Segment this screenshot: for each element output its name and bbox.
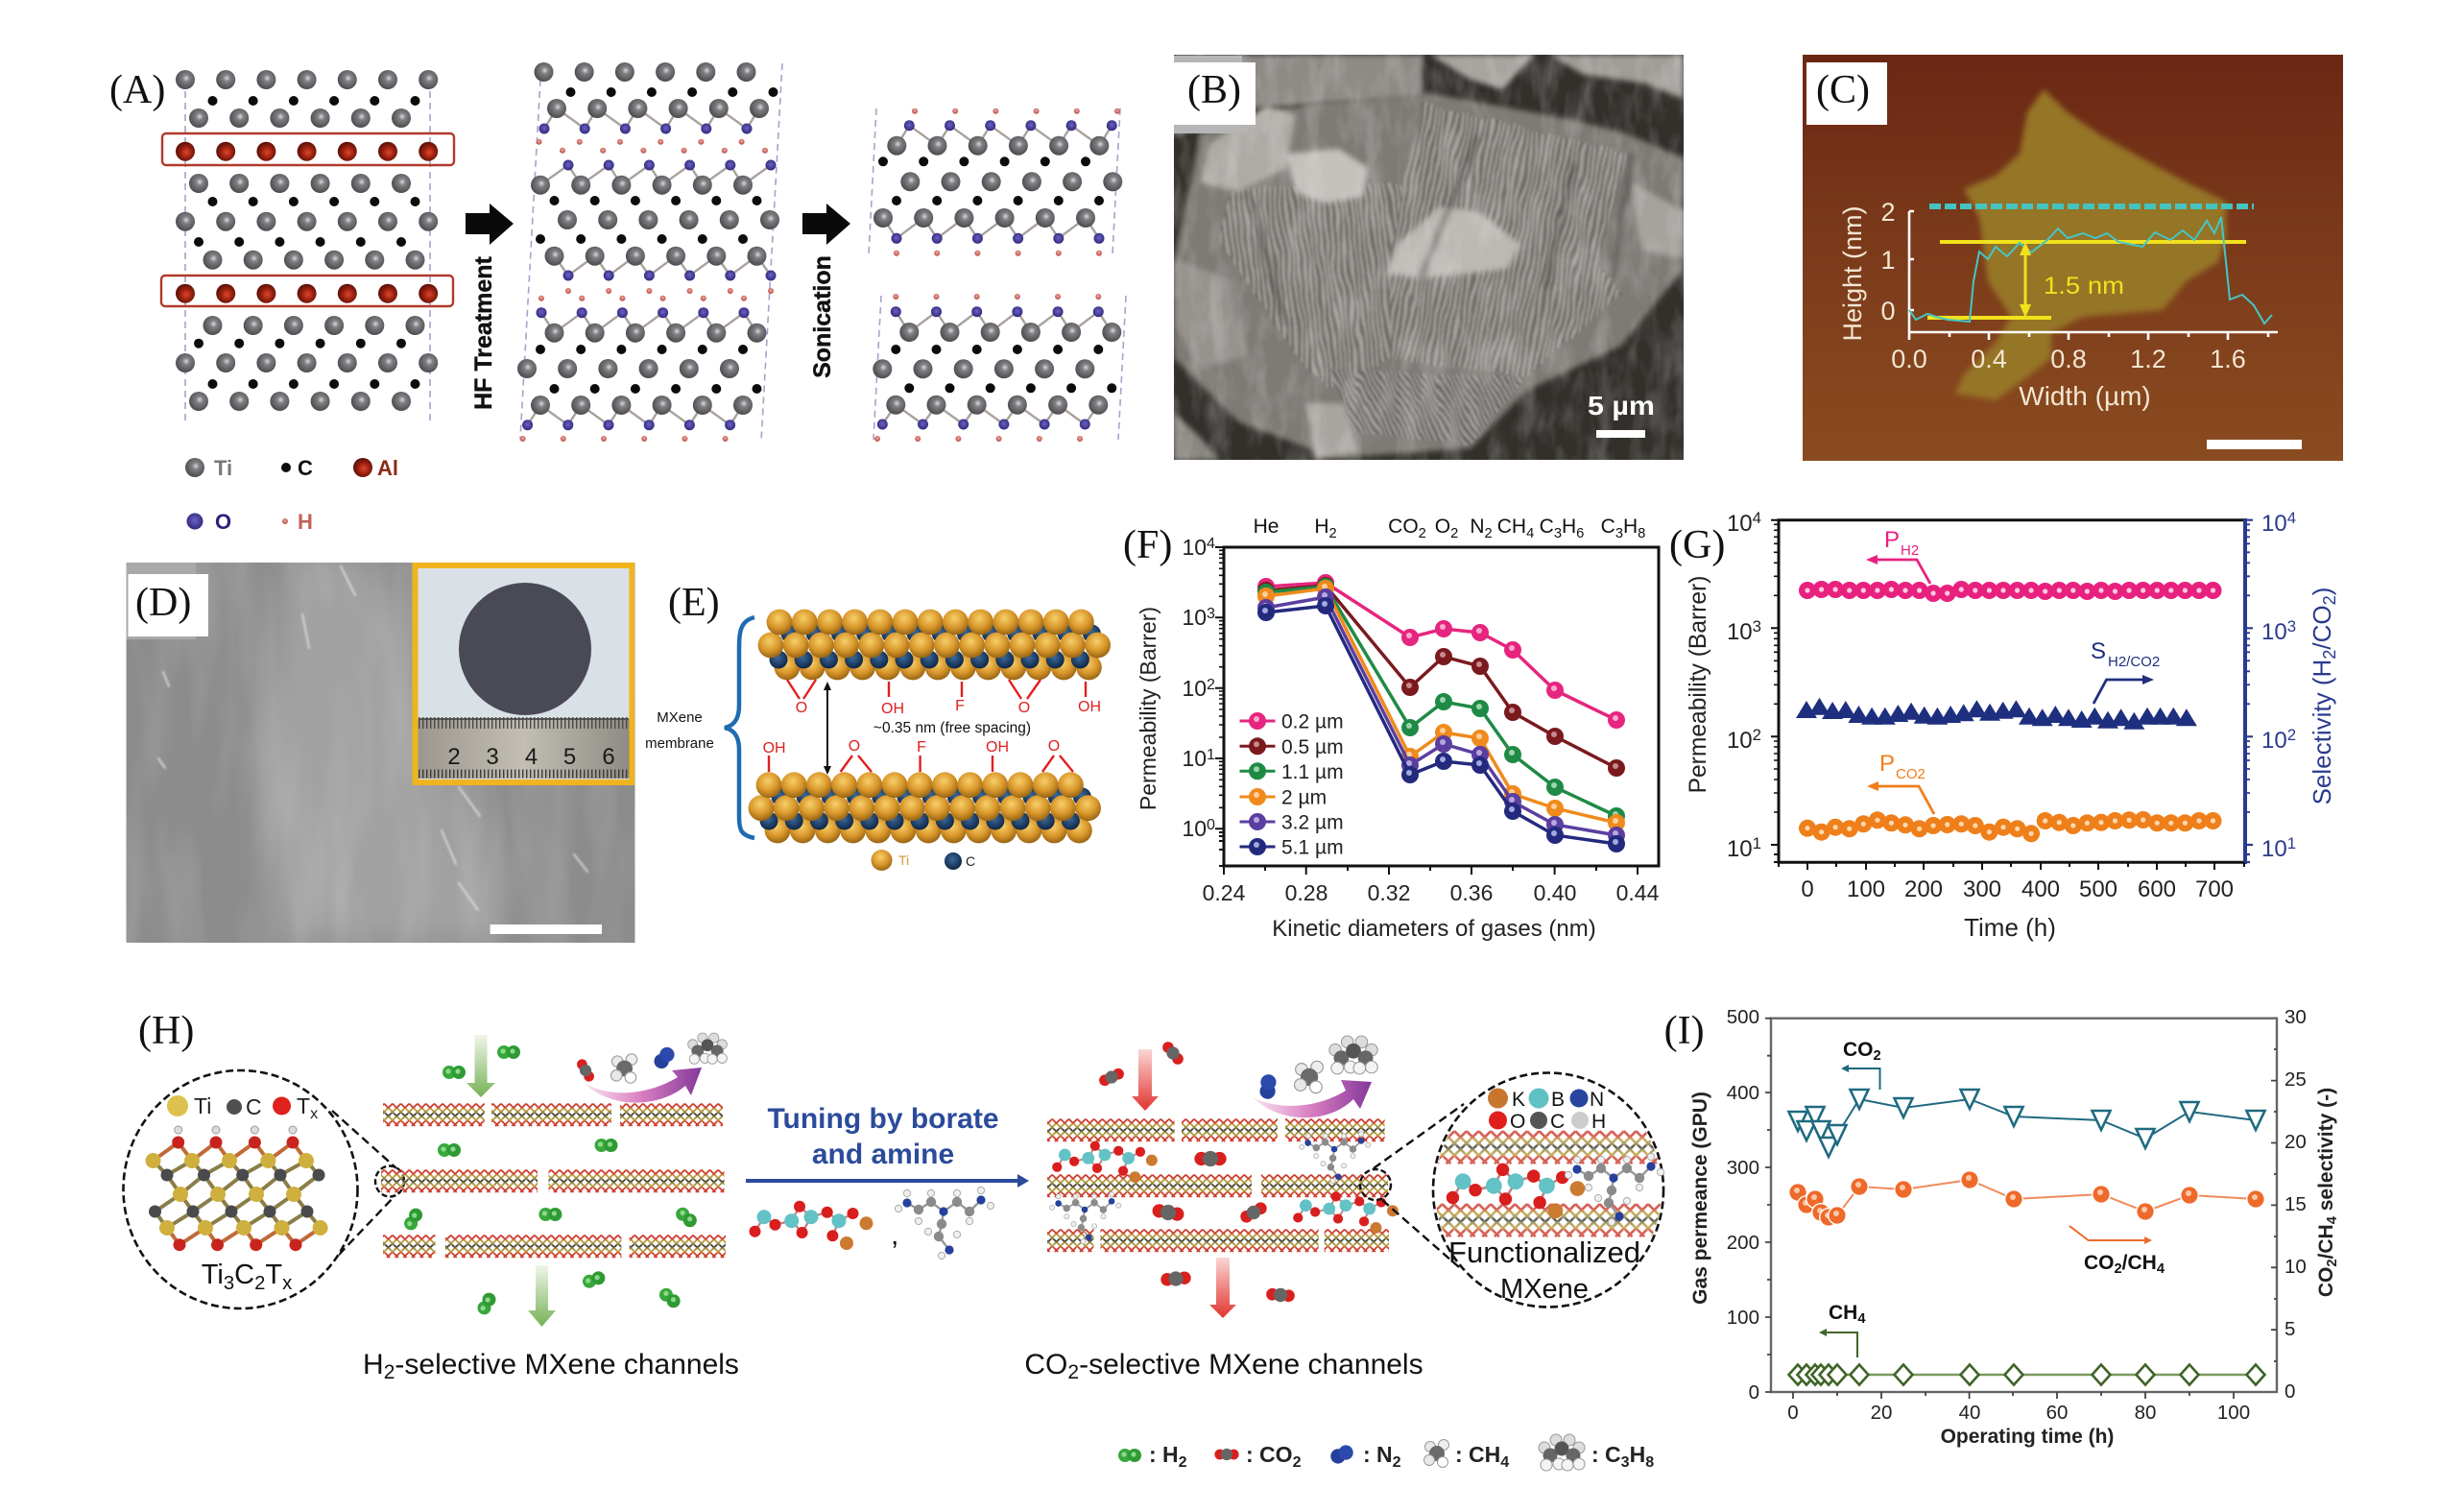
tick labels — [1727, 509, 2296, 902]
panel E: MXene membrane schematic: O — [1048, 738, 1060, 755]
gas labels — [1254, 516, 1645, 541]
legend: 0.2 µm — [1281, 710, 1344, 733]
callout: P CO2: CO2 — [1896, 766, 1926, 782]
tick labels: 102 — [2261, 726, 2296, 754]
callout: P H2: H2 — [1901, 542, 1919, 559]
callout: P H2: P — [1884, 527, 1900, 553]
series 3.2 µm — [1257, 588, 1625, 844]
axis titles: Permeability (Barrer) — [1686, 576, 1711, 793]
arrow: rejected gases, right — [1253, 1080, 1372, 1117]
label C box — [1803, 62, 1887, 133]
axis titles: Operating time (h) — [1941, 1426, 2114, 1448]
tick labels: 103 — [2261, 617, 2296, 645]
arrow: rejected gases, left — [584, 1068, 702, 1103]
panel H: H2-selective to CO2-selective channel schematic — [123, 1009, 1666, 1471]
gas labels: C3H8 — [1601, 516, 1645, 541]
series 5.1 µm — [1257, 597, 1625, 852]
height profile chart: 0.0 — [1891, 345, 1927, 373]
arrows: CO2 flow — [1132, 1049, 1236, 1318]
axis titles: Kinetic diameters of gases (nm) — [1272, 916, 1596, 942]
series: H2 permeability — [1799, 581, 2221, 602]
callout: CO2/CH4 — [2069, 1226, 2165, 1277]
tick labels: 500 — [1727, 1006, 1759, 1028]
panel E: MXene membrane schematic — [645, 581, 1111, 871]
gas labels: H2 — [1314, 516, 1337, 541]
legend: atom types: Ti — [214, 456, 232, 480]
panel D: membrane SEM with photo inset — [126, 563, 635, 943]
intercalated molecules — [1050, 1132, 1399, 1244]
legend: gas molecules: : CO2 — [1246, 1442, 1302, 1471]
legend: gas molecules: : H2 — [1149, 1442, 1187, 1471]
callout: P H2 — [1866, 527, 1930, 584]
panel E: MXene membrane schematic: OH — [881, 701, 904, 717]
tick labels: 40 — [1959, 1402, 1980, 1424]
tick labels: 104 — [2261, 509, 2296, 537]
callout: CO2: CO2 — [1843, 1039, 1881, 1064]
panel B: SEM of accordion-like MXene — [1174, 55, 1684, 460]
panel G: long-term stability chart — [1669, 509, 2338, 942]
zoom circle: functionalized MXene: O — [1510, 1111, 1525, 1133]
zoom circle: functionalized MXene: MXene — [1500, 1274, 1589, 1305]
series: CO2 permeability — [1799, 811, 2221, 842]
tick labels: 0 — [1801, 876, 1814, 902]
scale bar — [2207, 440, 2302, 449]
height profile chart: 1.6 — [2210, 345, 2246, 373]
tick labels: 700 — [2195, 876, 2234, 902]
tick labels: 104 — [1727, 509, 1761, 537]
bottom Ti/C layer — [749, 772, 1101, 843]
rejected gases, left — [574, 1033, 727, 1084]
tick labels: 102 — [1182, 676, 1215, 701]
tick labels: 500 — [2079, 876, 2117, 902]
tick labels: 100 — [1727, 1307, 1759, 1329]
tick labels: 101 — [1182, 746, 1215, 771]
legend: atom types — [185, 456, 398, 534]
legend: 1.1 µm — [1281, 761, 1344, 783]
arrow: tuning — [746, 1174, 1029, 1188]
text: MXene membrane — [645, 709, 714, 752]
label B box — [1174, 56, 1256, 133]
tick labels: 400 — [1727, 1082, 1759, 1104]
zoom circle: Ti3C2Tx: Tx — [297, 1093, 318, 1122]
label F: (F) — [1123, 523, 1172, 567]
tick labels: 15 — [2285, 1193, 2307, 1215]
panel E: MXene membrane schematic: O — [1018, 700, 1030, 716]
molecule: amine — [895, 1187, 994, 1260]
zoom circle: functionalized MXene — [1360, 1073, 1666, 1308]
axis titles: Permeability (Barrer) — [1136, 607, 1160, 810]
label I: (I) — [1664, 1009, 1705, 1053]
panel C: AFM image with height profile — [1803, 55, 2343, 461]
label A: (A) — [109, 68, 165, 112]
panel A: Ti3AlC2 crystal structures — [109, 62, 1126, 534]
height profile chart: 0 — [1880, 297, 1896, 325]
legend: 5.1 µm — [1281, 837, 1344, 858]
series: CO2/CH4 selectivity — [1788, 1170, 2265, 1227]
tick labels: 0 — [1787, 1402, 1799, 1424]
text: Sonication: Sonication — [809, 255, 836, 378]
tick labels: 0.36 — [1450, 880, 1493, 905]
zoom circle: Ti3C2Tx: Ti3C2Tx — [202, 1260, 292, 1294]
panel I: operating time stability chart — [1664, 1006, 2340, 1448]
tick labels: 80 — [2135, 1402, 2156, 1424]
inset: membrane photo with ruler: 2 — [447, 744, 461, 770]
axis titles: Time (h) — [1964, 913, 2056, 942]
tick labels: 103 — [1182, 605, 1215, 630]
structure: delaminated flakes — [869, 108, 1126, 442]
arrow: free spacing: ~0.35 nm (free spacing) — [873, 720, 1031, 736]
axis titles: Gas permeance (GPU) — [1689, 1092, 1711, 1305]
legend: 3.2 µm — [1281, 812, 1344, 833]
zoom circle: functionalized MXene: N — [1590, 1089, 1604, 1111]
callout: CH4: CH4 — [1829, 1302, 1866, 1327]
tick labels: 0.28 — [1285, 880, 1328, 905]
callout: P CO2 — [1867, 751, 1934, 814]
series 2 µm — [1257, 580, 1625, 831]
panel E: MXene membrane schematic: OH — [763, 740, 786, 756]
gas labels: N2 — [1470, 516, 1493, 541]
tick labels: 0.40 — [1534, 880, 1576, 905]
legend: atom types: O — [215, 510, 231, 534]
tick labels: 102 — [1727, 726, 1761, 754]
tick labels: 100 — [2217, 1402, 2250, 1424]
label H: (H) — [138, 1009, 194, 1053]
legend: gas molecules: : CH4 — [1455, 1442, 1509, 1471]
tick labels — [1727, 1006, 2307, 1424]
legend: C — [966, 853, 975, 869]
legend: gas molecules — [1118, 1434, 1654, 1471]
tick labels: 20 — [1871, 1402, 1892, 1424]
tick labels: 100 — [1847, 876, 1885, 902]
MXene layers: CO2 selective — [1047, 1116, 1389, 1255]
callout: P CO2: P — [1879, 751, 1895, 777]
comma: , — [891, 1219, 898, 1251]
tick labels: 20 — [2285, 1131, 2307, 1153]
scale bar — [490, 924, 602, 934]
gas labels: C3H6 — [1540, 516, 1584, 541]
axes — [1765, 1019, 2277, 1399]
tick labels: 104 — [1182, 535, 1215, 560]
MXene layers: H2 selective — [381, 1100, 726, 1260]
structure: etched multilayer — [517, 62, 782, 442]
arrows: H2 flow — [466, 1035, 556, 1327]
tick labels: 10 — [2285, 1256, 2307, 1278]
scale bar 5 µm: 5 µm — [1588, 391, 1655, 420]
arrow: HF treatment — [466, 204, 514, 245]
axis titles — [1136, 607, 1596, 942]
callout: S H2/CO2: S — [2091, 638, 2106, 664]
series: CH4 permeance — [1789, 1365, 2265, 1384]
legend: 0.5 µm — [1281, 736, 1344, 758]
legend — [1240, 710, 1344, 858]
series: H2/CO2 selectivity — [1796, 698, 2197, 730]
axis titles — [1686, 576, 2338, 942]
label G: (G) — [1669, 523, 1725, 567]
inset: membrane photo with ruler: 5 — [563, 744, 576, 770]
label D box: (D) — [135, 581, 191, 625]
tick labels: 0.24 — [1203, 880, 1246, 905]
brace — [725, 617, 754, 838]
arrow: free spacing — [824, 682, 1031, 775]
panel E: MXene membrane schematic: O — [849, 738, 860, 755]
legend: atom types: C — [298, 456, 313, 480]
zoom circle: Ti3C2Tx: Ti — [194, 1093, 211, 1118]
inset: membrane photo with ruler: 4 — [525, 744, 538, 770]
title: tuning by borate and amine: and amine — [812, 1139, 954, 1170]
tick labels: 25 — [2285, 1068, 2307, 1091]
label B box: (B) — [1187, 68, 1241, 112]
series 0.5 µm — [1257, 577, 1625, 777]
height profile chart: 1.5 nm — [2044, 273, 2124, 300]
text: MXene membrane: MXene — [657, 709, 703, 726]
tick labels: 103 — [1727, 617, 1761, 645]
tick labels: 60 — [2046, 1402, 2068, 1424]
zoom circle: Ti3C2Tx — [123, 1070, 404, 1308]
tick labels: 30 — [2285, 1006, 2307, 1028]
panel E: MXene membrane schematic: F — [955, 698, 965, 714]
legend: 2 µm — [1281, 787, 1327, 808]
H2 molecules — [402, 1045, 700, 1317]
rejected gases, right — [1259, 1036, 1377, 1099]
zoom circle: functionalized MXene: K — [1512, 1089, 1525, 1111]
panel E: MXene membrane schematic: OH — [986, 739, 1009, 756]
tick labels: 100 — [1182, 816, 1215, 841]
axis titles — [1689, 1088, 2340, 1448]
height profile chart: 1.2 — [2130, 345, 2166, 373]
legend: gas molecules: : N2 — [1363, 1442, 1401, 1471]
text: MXene membrane: membrane — [645, 735, 714, 752]
caption: H2 selective: H2-selective MXene channels — [363, 1349, 739, 1383]
zoom circle: functionalized MXene: C — [1550, 1111, 1565, 1133]
height profile chart: Width (µm) — [2019, 381, 2151, 411]
axis titles: CO2/CH4 selectivity (-) — [2315, 1088, 2340, 1297]
top Ti/C layer — [758, 610, 1111, 680]
arrow: sonication — [802, 204, 850, 245]
tick labels: 200 — [1727, 1232, 1759, 1254]
panel E: MXene membrane schematic: O — [796, 700, 807, 716]
structure: MAX phase — [161, 70, 454, 422]
tick labels: 0.32 — [1368, 880, 1410, 905]
callout: CO2 — [1841, 1039, 1881, 1090]
series: CO2 permeance — [1789, 1090, 2265, 1157]
title: tuning by borate and amine — [767, 1103, 999, 1170]
inset: membrane photo with ruler: 6 — [602, 744, 615, 770]
tick labels: 300 — [1963, 876, 2001, 902]
inset: membrane photo with ruler — [413, 563, 634, 785]
callout: CO2/CH4: CO2/CH4 — [2084, 1252, 2165, 1277]
gas labels: O2 — [1435, 516, 1458, 541]
height profile chart: 1 — [1880, 246, 1896, 275]
legend: atom types: Al — [377, 456, 398, 480]
series 0.2 µm — [1257, 574, 1625, 729]
gas labels: CO2 — [1388, 516, 1426, 541]
text: HF Treatment: HF Treatment — [470, 255, 497, 410]
title: tuning by borate and amine: Tuning by borate — [767, 1103, 999, 1135]
height profile chart: 0.4 — [1971, 345, 2007, 373]
height profile chart: 2 — [1880, 198, 1896, 227]
caption: CO2 selective: CO2-selective MXene channels — [1024, 1349, 1423, 1383]
gas labels: CH4 — [1497, 516, 1534, 541]
tick labels: 5 — [2285, 1318, 2295, 1340]
legend: gas molecules: : C3H8 — [1591, 1442, 1654, 1471]
tick labels: 0.44 — [1616, 880, 1660, 905]
panel F: permeability vs kinetic diameter chart — [1123, 516, 1660, 942]
legend: Ti — [898, 852, 909, 868]
inset: membrane photo with ruler: 3 — [486, 744, 499, 770]
legend — [872, 850, 975, 871]
callout: CH4 — [1819, 1302, 1866, 1357]
gas labels: He — [1254, 516, 1279, 538]
zoom circle: functionalized MXene: B — [1551, 1089, 1565, 1111]
zoom circle: Ti3C2Tx: C — [246, 1094, 262, 1119]
tick labels: 0 — [2285, 1380, 2295, 1403]
CO2 molecules — [1097, 1039, 1295, 1303]
height profile chart — [1838, 198, 2278, 411]
tick labels: 101 — [1727, 834, 1761, 862]
callout: S H2/CO2: H2/CO2 — [2108, 654, 2160, 670]
label C box: (C) — [1816, 68, 1870, 112]
callout: S H2/CO2 — [2091, 638, 2160, 704]
height profile chart: Height (nm) — [1838, 205, 1867, 342]
label D box — [126, 563, 208, 639]
panel E: MXene membrane schematic: OH — [1078, 699, 1101, 715]
tick labels: 200 — [1904, 876, 1943, 902]
zoom circle: functionalized MXene: H — [1591, 1111, 1606, 1133]
molecule: borate — [749, 1201, 873, 1250]
tick labels: 300 — [1727, 1157, 1759, 1179]
tick labels: 0 — [1749, 1381, 1759, 1404]
legend: atom types: H — [298, 510, 313, 534]
height profile chart: 0.8 — [2050, 345, 2087, 373]
tick labels: 400 — [2021, 876, 2060, 902]
axis titles: Selectivity (H2/CO2) — [2308, 588, 2338, 804]
tick labels: 600 — [2138, 876, 2176, 902]
panel E: MXene membrane schematic: F — [917, 739, 926, 756]
series 1.1 µm — [1257, 578, 1625, 825]
scale bar 5 µm — [1589, 396, 1653, 438]
axes — [1771, 518, 2253, 870]
label E: (E) — [668, 581, 720, 625]
tick labels: 101 — [2261, 834, 2296, 862]
axes — [1215, 547, 1659, 875]
zoom circle: functionalized MXene: Functionalized — [1448, 1236, 1640, 1269]
surface terminations — [769, 680, 1086, 772]
tick labels — [1182, 535, 1660, 905]
